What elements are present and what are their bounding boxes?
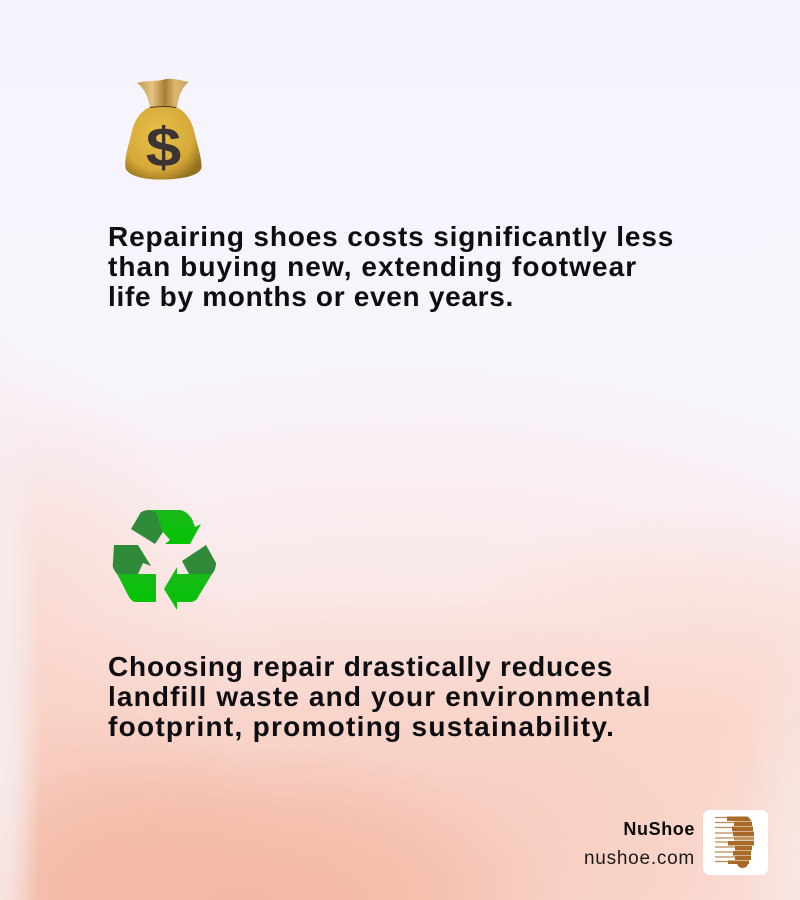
text block: repair cost: than buying new, extending footwear xyxy=(108,251,637,282)
text block: sustainability: Choosing repair drastically reduces xyxy=(108,651,613,682)
text block: repair cost: Repairing shoes costs significantly less xyxy=(108,221,674,252)
text block: repair cost: life by months or even years. xyxy=(108,281,514,312)
icon: money bag xyxy=(125,78,202,180)
brand name: NuShoe xyxy=(623,819,695,839)
brand url: nushoe.com xyxy=(584,848,695,869)
icon: money bag: $ xyxy=(146,116,181,179)
text block: sustainability: landfill waste and your environmental xyxy=(108,681,652,712)
text block: repair cost xyxy=(108,221,674,312)
icon: recycling symbol xyxy=(112,510,216,610)
text block: sustainability: footprint, promoting sustainability. xyxy=(108,711,615,742)
logo xyxy=(703,810,768,875)
text block: sustainability xyxy=(108,651,652,742)
